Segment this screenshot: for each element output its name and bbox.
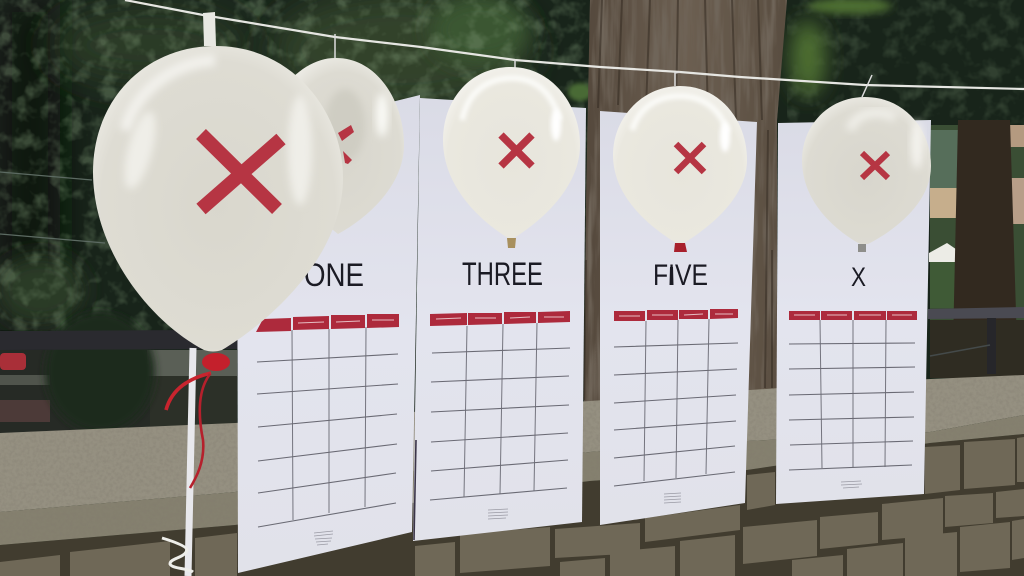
balloon 1 strap (203, 12, 216, 46)
poster: X (776, 120, 931, 504)
table THREE (430, 311, 570, 500)
stone wall cap (0, 375, 1024, 545)
table X (789, 311, 917, 470)
balloon 2 red cross fragment (338, 125, 354, 164)
balloon 5 cross (862, 153, 888, 178)
background foliage (0, 0, 1024, 440)
footer ONE (314, 531, 333, 545)
hedge (45, 312, 155, 432)
far background: right side trees, buildings and tent (929, 125, 1024, 320)
table FIVE (614, 309, 738, 486)
balloon 1 stick (162, 348, 193, 576)
balloon 1 cross (201, 134, 281, 209)
poster: THREE (413, 98, 586, 541)
title FIVE: FIVE (653, 259, 708, 292)
railing right (928, 307, 1024, 374)
red ribbon (166, 353, 230, 488)
poster: FIVE (600, 111, 757, 525)
railing left (0, 330, 240, 350)
hanging string (125, 0, 1024, 89)
poster: ONE (237, 95, 420, 573)
table ONE (256, 314, 399, 527)
background: left under-railing area (0, 312, 237, 435)
title X: X (851, 262, 866, 292)
balloon 3 (443, 60, 580, 248)
background wires (0, 172, 105, 243)
balloon 3 cross (501, 135, 532, 166)
balloon 1 (front, large) (93, 46, 343, 351)
ground behind right railing (930, 320, 1024, 378)
balloon 4 (613, 72, 747, 252)
tree trunk right (953, 120, 1017, 345)
balloon 2 (behind) (280, 34, 404, 234)
stone wall base with bricks (0, 434, 1024, 576)
mark inside letter I (670, 267, 674, 285)
footer FIVE (664, 493, 681, 503)
balloon 5 (802, 75, 931, 252)
title ONE: ONE (304, 257, 364, 293)
footer THREE (488, 509, 508, 519)
title THREE: THREE (462, 256, 543, 292)
tree trunk centre (580, 0, 790, 405)
balloon 4 cross (676, 144, 704, 172)
footer X (841, 481, 862, 488)
